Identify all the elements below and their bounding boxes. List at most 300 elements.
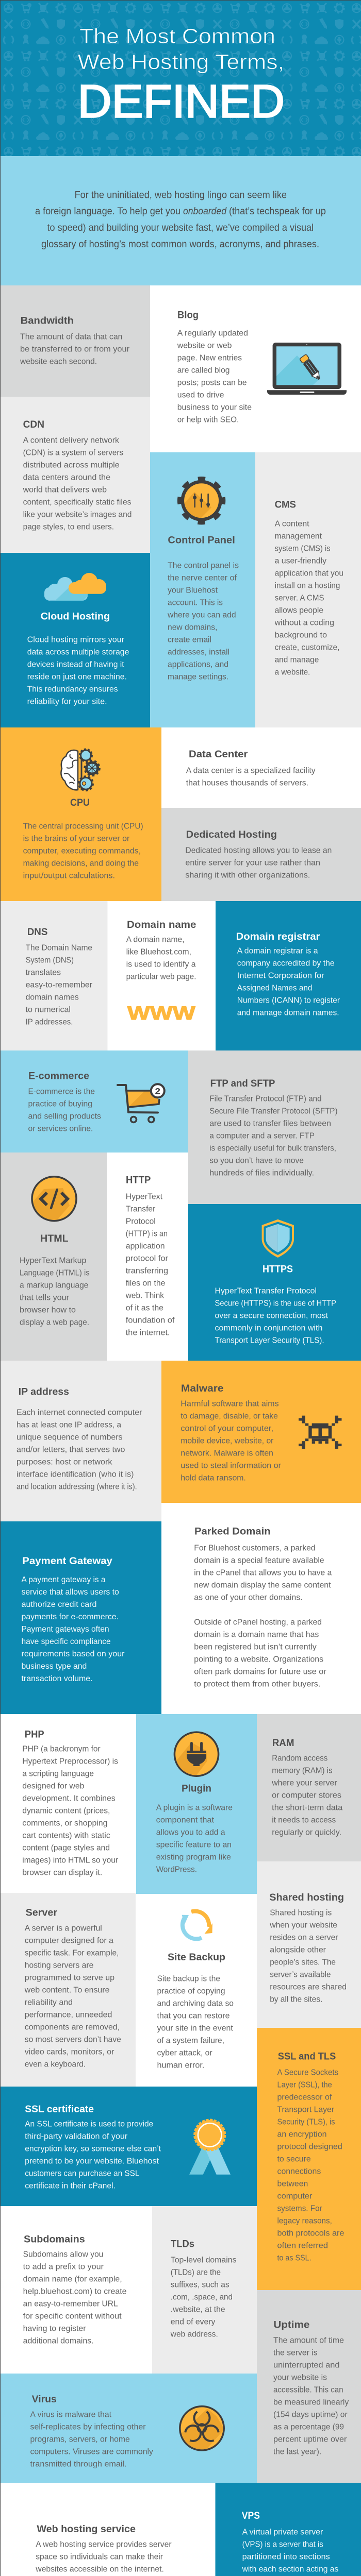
definition: cpu: computer, executing commands, <box>23 847 141 856</box>
definition: shared hosting: Shared hosting is <box>270 1909 332 1918</box>
definition: e-commerce: practice of buying <box>28 1099 92 1108</box>
definition: site backup <box>157 1975 234 2070</box>
heading: e-commerce: E-commerce <box>28 1071 89 1082</box>
definition: bandwidth <box>20 332 130 366</box>
definition: subdomains: additional domains. <box>23 2336 94 2345</box>
definition: web hosting service: space so individuals can make their <box>36 2553 163 2562</box>
definition: malware: used to steal information or <box>180 1462 282 1470</box>
definition: vps: (VPS) is a server that is <box>242 2540 323 2549</box>
heading: plugin: Plugin <box>182 1783 211 1794</box>
definition: https: Secure (HTTPS) is the use of HTTP <box>215 1299 336 1308</box>
heading: bandwidth: Bandwidth <box>21 315 74 326</box>
intro text: onboarded <box>183 206 227 217</box>
definition: site backup: practice of copying <box>157 1987 225 1996</box>
definition: web hosting service <box>35 2540 172 2574</box>
definition: tlds <box>170 2256 236 2339</box>
icon: biohazard badge <box>180 2406 224 2452</box>
definition: parked domain: often park domains for future use or <box>194 1667 326 1676</box>
panel: control panel <box>150 452 255 727</box>
definition: cms: a website. <box>275 668 310 676</box>
title: the most common web hosting terms <box>77 24 284 74</box>
heading: dedicated hosting: Dedicated Hosting <box>186 829 277 840</box>
definition: http: foundation of <box>126 1316 175 1325</box>
intro text <box>35 190 326 250</box>
icon: clouds <box>44 573 106 601</box>
definition: payment gateway: Payment gateways often <box>22 1625 109 1634</box>
definition: blog: page. New entries <box>177 354 242 363</box>
heading: vps: VPS <box>242 2510 260 2521</box>
panel: domain registrar <box>216 901 361 1050</box>
definition: cdn: page styles, to end users. <box>23 522 114 531</box>
definition: ip address: and location addressing (where it is). <box>17 1483 137 1492</box>
definition: malware: hold data ransom. <box>180 1474 246 1483</box>
definition: ssl and tls: between <box>277 2180 308 2189</box>
definition: data center: A data center is a specialized facility <box>186 767 316 775</box>
definition: dns: translates <box>26 968 61 977</box>
panel: subdomains <box>0 2206 152 2374</box>
definition: html: display a web page. <box>20 1318 89 1327</box>
definition: domain name: particular web page. <box>126 972 196 981</box>
definition: site backup: and archiving data so <box>157 1999 234 2008</box>
definition: subdomains: an easy-to-remember URL <box>23 2299 118 2308</box>
heading: server: Server <box>26 1907 57 1918</box>
definition: ip address: Each internet connected computer <box>17 1409 142 1417</box>
definition: uptime: uninterrupted and <box>273 2361 339 2369</box>
heading: shared hosting: Shared hosting <box>269 1892 344 1903</box>
definition: subdomains: domain name (for example, <box>23 2275 122 2283</box>
heading: ssl certificate: SSL certificate <box>25 2104 94 2115</box>
heading: domain name: Domain name <box>127 919 196 930</box>
heading: control panel: Control Panel <box>168 535 235 546</box>
definition: ssl certificate <box>25 2120 161 2190</box>
definition: ftp and sftp: is especially useful for bulk transfers, <box>209 1144 336 1153</box>
definition: ram: where your server <box>271 1779 337 1788</box>
definition: domain name: like Bluehost.com, <box>126 947 191 956</box>
definition: uptime: be measured linearly <box>273 2398 349 2406</box>
definition: parked domain: Outside of cPanel hosting, a parked <box>194 1618 322 1626</box>
panel: dns <box>0 901 107 1050</box>
definition: https: Transport Layer Security (TLS). <box>215 1336 324 1345</box>
definition: plugin: A plugin is a software <box>156 1803 233 1812</box>
panel: uptime <box>257 2290 361 2483</box>
panel: vps <box>216 2483 361 2576</box>
definition: cms: create, customize, <box>275 643 339 652</box>
definition: cpu: The central processing unit (CPU) <box>23 822 143 831</box>
definition: subdomains <box>23 2250 127 2345</box>
definition: shared hosting: when your website <box>269 1921 337 1930</box>
definition: cms: application that you <box>275 569 343 578</box>
definition: http: (HTTP) is an <box>126 1230 168 1239</box>
panel: ram <box>257 1714 361 1861</box>
definition: web hosting service: websites accessible on the internet. <box>35 2565 164 2574</box>
heading: cms: CMS <box>275 499 296 511</box>
intro text: a foreign language. To help get you <box>35 206 180 217</box>
definition: malware: control of your computer, <box>180 1425 273 1433</box>
panel: virus <box>0 2374 257 2483</box>
definition: cloud hosting: data across multiple storage <box>27 648 129 657</box>
definition: vps: A virtual private server <box>242 2528 323 2537</box>
definition: https <box>215 1287 336 1345</box>
definition: html: browser how to <box>20 1306 76 1315</box>
definition: control panel: create email <box>168 636 211 645</box>
definition: control panel: manage settings. <box>168 673 228 682</box>
definition: malware: to damage, disable, or take <box>180 1412 278 1421</box>
definition: payment gateway: requirements based on your <box>22 1650 125 1658</box>
definition: bandwidth: be transferred to or from your <box>20 345 130 353</box>
definition: ssl and tls: to as SSL. <box>277 2254 311 2263</box>
definition: dns: IP addresses. <box>26 1018 73 1026</box>
definition: dedicated hosting: sharing it with other organizations. <box>185 871 310 880</box>
icon: shield <box>262 1219 294 1258</box>
definition: control panel: your Bluehost <box>168 586 218 595</box>
definition: subdomains: having to register <box>23 2324 86 2333</box>
definition: parked domain: For Bluehost customers, a parked <box>194 1544 316 1552</box>
definition: uptime: percent uptime over <box>273 2435 347 2444</box>
definition: payment gateway <box>22 1575 125 1683</box>
definition: cdn <box>23 436 132 531</box>
definition: blog: website or web <box>177 342 232 350</box>
panel: header <box>0 0 361 156</box>
definition: dns: to numerical <box>26 1005 71 1014</box>
definition: html: a markup language <box>20 1281 88 1290</box>
panel: cloud hosting <box>0 553 150 727</box>
definition: php: browser can display it. <box>22 1868 102 1877</box>
definition: ftp and sftp: File Transfer Protocol (FTP) and <box>209 1095 322 1104</box>
definition: server: reliability and <box>25 1998 73 2007</box>
heading: parked domain: Parked Domain <box>194 1526 271 1537</box>
cart count: 2 <box>155 1086 160 1096</box>
panel: domain name <box>107 901 216 1050</box>
definition: ssl and tls: predecessor of <box>277 2093 332 2102</box>
definition: malware: mobile device, website, or <box>180 1437 274 1446</box>
definition: ssl certificate: pretend to be your website. Bluehost <box>25 2157 159 2165</box>
definition: site backup: that you can restore <box>157 2012 230 2021</box>
definition: php: cart contents) with static <box>22 1831 110 1840</box>
intro text: For the uninitiated, web hosting lingo can seem like <box>75 190 287 200</box>
definition: shared hosting: server’s available <box>270 1971 331 1979</box>
panel: plugin <box>136 1714 257 1894</box>
definition: plugin: WordPress. <box>156 1865 197 1874</box>
definition: cms: and manage <box>275 655 319 664</box>
definition: http: Protocol <box>126 1217 156 1226</box>
definition: domain registrar: A domain registrar is a <box>237 947 318 956</box>
panel: https <box>188 1204 361 1361</box>
definition: server: A server is a powerful <box>25 1924 102 1933</box>
heading: web hosting service: Web hosting service <box>37 2523 136 2535</box>
definition: dns: System (DNS) <box>26 956 74 964</box>
definition: malware: network. Malware is often <box>180 1449 273 1458</box>
definition: control panel: the nerve center of <box>168 574 237 583</box>
definition: html: that tells your <box>20 1294 70 1302</box>
definition: dns <box>26 943 93 1026</box>
definition: server: hosting servers are <box>25 1961 93 1970</box>
definition: ip address: has at least one IP address, a <box>17 1421 121 1430</box>
definition: cms: without a coding <box>274 618 334 627</box>
definition: ssl and tls: computer <box>277 2192 313 2201</box>
definition: payment gateway: payments for e-commerce. <box>22 1613 119 1621</box>
panel: shared hosting <box>257 1861 361 2028</box>
definition: ip address: interface identification (who it is) <box>17 1470 134 1479</box>
definition: blog: business to your site <box>177 403 252 412</box>
heading: uptime: Uptime <box>273 2319 310 2331</box>
definition: php: content (page styles and <box>22 1843 110 1852</box>
definition: control panel: The control panel is <box>168 562 239 570</box>
definition: cms <box>274 519 343 676</box>
definition: tlds: web address. <box>170 2330 218 2339</box>
definition: blog: used to drive <box>177 391 224 400</box>
panel: malware <box>161 1361 361 1503</box>
definition: cloud hosting: reside on just one machine. <box>27 673 127 682</box>
heading: cpu: CPU <box>70 797 90 808</box>
definition: http: of it as the <box>126 1304 163 1313</box>
definition: ftp and sftp: a computer and a server. FTP <box>209 1132 315 1141</box>
definition: server: video cards, monitors, or <box>25 2047 114 2057</box>
panel: cdn <box>0 397 150 553</box>
intro text: to speed) and building your website fast, we’ve compiled a visual <box>47 223 314 233</box>
heading: tlds: TLDs <box>171 2239 194 2250</box>
definition: php: PHP (a backronym for <box>22 1744 101 1753</box>
definition: ssl certificate: An SSL certificate is used to provide <box>25 2120 153 2128</box>
panel: web hosting service <box>0 2483 216 2576</box>
definition: control panel: account. This is <box>168 599 223 607</box>
definition: cdn: like your website’s images and <box>23 510 132 519</box>
definition: shared hosting <box>269 1909 347 2004</box>
definition: cpu: is the brains of your server or <box>23 835 130 843</box>
definition: server: specific task. For example, <box>25 1948 119 1957</box>
definition: html: HyperText Markup <box>20 1257 86 1265</box>
definition: uptime: (154 days uptime) or <box>273 2410 348 2419</box>
definition: dedicated hosting: Dedicated hosting allows you to lease an <box>185 846 332 855</box>
panel: payment gateway <box>0 1521 161 1714</box>
definition: control panel: applications, and <box>168 660 228 669</box>
panel: server <box>0 1893 136 2087</box>
definition: blog: or help with SEO. <box>177 416 239 425</box>
definition: payment gateway: A payment gateway is a <box>22 1575 106 1584</box>
heading: html: HTML <box>40 1233 69 1244</box>
definition: plugin: allows you to add a <box>156 1828 225 1837</box>
definition: server: web content. To ensure <box>24 1986 110 1994</box>
definition: cms: install on a hosting <box>275 581 340 590</box>
heading: https: HTTPS <box>262 1263 293 1275</box>
definition: domain registrar: Internet Corporation for <box>237 972 324 980</box>
heading: ram: RAM <box>272 1737 294 1749</box>
definition: ssl and tls: connections <box>277 2167 321 2176</box>
definition: subdomains: Subdomains allow you <box>23 2250 103 2259</box>
definition: data center: that houses thousands of servers. <box>186 779 308 788</box>
definition: payment gateway: have specific compliance <box>22 1637 111 1646</box>
definition: php: Hypertext Preprocessor) is <box>22 1757 118 1766</box>
panel: parked domain <box>161 1503 361 1714</box>
definition: cdn: content, specifically static files <box>23 498 131 506</box>
definition: ip address: purposes: host or network <box>17 1458 112 1467</box>
definition: ssl and tls: an encryption <box>277 2130 327 2139</box>
definition: ram: the short-term data <box>272 1804 342 1812</box>
definition: tlds: .com, .space, and <box>171 2293 233 2302</box>
definition: e-commerce: E-commerce is the <box>28 1087 95 1096</box>
icon: code badge <box>32 1177 76 1226</box>
definition: bandwidth: The amount of data that can <box>20 332 123 341</box>
definition: http: application <box>126 1242 165 1251</box>
panel: php <box>0 1714 136 1893</box>
icon: plug badge <box>174 1732 219 1783</box>
definition: blog: A regularly updated <box>177 329 248 338</box>
panel: ssl and tls <box>257 2028 361 2290</box>
definition: http: protocol for <box>126 1255 169 1263</box>
definition: ftp and sftp: are used to transfer files between <box>209 1120 331 1128</box>
definition: e-commerce <box>28 1087 101 1133</box>
definition: parked domain <box>194 1544 332 1688</box>
definition: server: performance, unneeded <box>25 2010 112 2019</box>
heading: ip address: IP address <box>19 1386 69 1398</box>
definition: dedicated hosting: entire server for your use rather than <box>185 859 320 868</box>
definition: ssl and tls: both protocols are <box>277 2229 344 2238</box>
definition: vps <box>242 2528 338 2576</box>
panel: bandwidth <box>0 285 150 397</box>
definition: data center <box>186 767 316 788</box>
definition: control panel <box>167 562 239 682</box>
definition: ssl and tls: Security (TLS), is <box>277 2118 335 2127</box>
definition: uptime: the last year). <box>273 2447 321 2456</box>
intro text: (that’s techspeak for up <box>229 206 326 217</box>
definition: domain registrar: Assigned Names and <box>237 984 312 993</box>
definition: http: web. Think <box>125 1292 165 1300</box>
definition: plugin: component that <box>156 1816 215 1824</box>
definition: domain registrar <box>237 947 340 1018</box>
definition: ssl and tls <box>277 2069 344 2263</box>
definition: virus <box>30 2411 153 2469</box>
definition: parked domain: been registered but isn’t currently <box>194 1642 317 1651</box>
definition: ssl and tls: Layer (SSL), the <box>277 2081 332 2090</box>
definition: domain registrar: and manage domain names. <box>237 1009 339 1018</box>
definition: ssl certificate: encryption key, so someone else can’t <box>25 2144 161 2153</box>
definition: server: components are removed, <box>25 2023 120 2031</box>
definition: ip address <box>17 1409 142 1492</box>
definition: html: Language (HTML) is <box>20 1269 90 1278</box>
definition: php: dynamic content (prices, <box>22 1806 110 1815</box>
heading: domain registrar: Domain registrar <box>236 931 320 942</box>
definition: subdomains: to add a prefix to your <box>23 2263 104 2272</box>
definition: site backup: cyber attack, or <box>157 2049 212 2058</box>
definition: dns: easy-to-remember <box>26 980 93 989</box>
definition: php <box>22 1744 119 1877</box>
definition: e-commerce: and selling products <box>28 1112 101 1121</box>
icon: shopping cart <box>118 1084 165 1122</box>
definition: blog: are called blog <box>177 366 230 375</box>
panel: http <box>107 1153 188 1361</box>
definition: https: commonly in conjunction with <box>215 1324 322 1333</box>
heading: cloud hosting: Cloud Hosting <box>41 611 110 622</box>
heading: php: PHP <box>25 1728 44 1740</box>
definition: php: comments, or shopping <box>22 1819 107 1827</box>
definition: payment gateway: business type and <box>22 1662 87 1671</box>
definition: uptime <box>273 2336 349 2456</box>
definition: parked domain: new domain display the same content <box>194 1581 331 1589</box>
definition: cloud hosting: devices instead of having it <box>27 660 124 669</box>
definition: cms: system (CMS) is <box>275 544 331 553</box>
panel: introduction <box>0 156 361 285</box>
definition: plugin: existing program like <box>156 1853 231 1861</box>
heading: cdn: CDN <box>23 419 44 430</box>
definition: blog <box>177 329 252 425</box>
panel: blog <box>150 285 361 452</box>
definition: ssl certificate: customers can purchase an SSL <box>25 2169 140 2178</box>
panel: data center <box>161 727 361 808</box>
definition: bandwidth: website each second. <box>20 357 97 366</box>
definition: malware <box>180 1400 282 1483</box>
definition: site backup: your site in the event <box>157 2024 233 2033</box>
definition: parked domain: as one of your other domains. <box>194 1593 303 1602</box>
heading: data center: Data Center <box>189 749 248 760</box>
definition: control panel: new domains, <box>168 623 217 632</box>
definition: http <box>125 1193 175 1337</box>
definition: http: the internet. <box>126 1329 170 1337</box>
definition: ssl and tls: often referred <box>277 2242 328 2250</box>
definition: shared hosting: people’s sites. The <box>270 1958 336 1967</box>
panel: e-commerce <box>0 1050 188 1153</box>
definition: cpu: input/output calculations. <box>23 872 115 880</box>
definition: cms: A content <box>275 519 309 528</box>
definition: malware: Harmful software that aims <box>180 1400 279 1409</box>
definition: ssl certificate: third-party validation of your <box>25 2132 128 2141</box>
definition: domain registrar: company accredited by the <box>237 959 335 968</box>
definition: site backup: human error. <box>157 2061 204 2070</box>
heading: malware: Malware <box>181 1383 224 1394</box>
definition: http: HyperText <box>126 1193 163 1201</box>
definition: server: programmed to serve up <box>25 1973 114 1982</box>
definition: parked domain: domain is a special feature available <box>194 1556 324 1565</box>
definition: tlds: .website, at the <box>171 2306 225 2314</box>
definition: ftp and sftp: hundreds of files individually. <box>209 1168 314 1177</box>
definition: ssl and tls: A Secure Sockets <box>277 2069 338 2077</box>
definition: control panel: where you can add <box>167 611 236 620</box>
icon: gear with sliders <box>179 479 223 522</box>
panel: cms <box>255 452 361 727</box>
definition: cms: management <box>275 532 322 540</box>
definition: web hosting service: A web hosting service provides server <box>36 2540 172 2549</box>
panel: dedicated hosting <box>161 808 361 901</box>
definition: http: Transfer <box>126 1205 156 1214</box>
definition: cdn: world that delivers web <box>23 485 107 494</box>
definition: dns: domain names <box>26 993 79 1002</box>
definition: tlds: Top-level domains <box>171 2256 236 2265</box>
definition: cms: allows people <box>275 606 323 615</box>
definition: payment gateway: transaction volume. <box>22 1674 93 1683</box>
definition: uptime: the server is <box>273 2348 318 2357</box>
definition: uptime: as a percentage (99 <box>273 2422 344 2431</box>
definition: php: a scripting language <box>22 1769 94 1778</box>
definition: ssl and tls: systems. For <box>277 2205 322 2213</box>
definition: shared hosting: resides on a server <box>270 1934 338 1942</box>
definition: https: HyperText Transfer Protocol <box>215 1287 317 1296</box>
definition: cloud hosting: Cloud hosting mirrors your <box>27 636 125 645</box>
definition: ssl and tls: legacy reasons, <box>277 2217 332 2226</box>
definition: ram: Random access <box>272 1754 327 1763</box>
definition: php: images) into HTML so your <box>22 1856 119 1865</box>
definition: ram <box>271 1754 342 1837</box>
definition: html <box>20 1257 90 1327</box>
definition: site backup: of a system failure, <box>157 2037 224 2045</box>
definition: tlds: (TLDs) are the <box>171 2268 221 2277</box>
definition: cloud hosting <box>27 636 129 706</box>
definition: cdn: A content delivery network <box>23 436 120 445</box>
definition: ip address: and/or letters, that serves two <box>17 1446 125 1454</box>
definition: plugin: specific feature to an <box>156 1840 232 1849</box>
heading: ssl and tls: SSL and TLS <box>278 2051 336 2062</box>
definition: server: so most servers don’t have <box>25 2035 121 2044</box>
heading: blog: Blog <box>177 310 199 321</box>
definition: cdn: distributed across multiple <box>23 461 120 469</box>
definition: cdn: data centers around the <box>23 473 110 482</box>
